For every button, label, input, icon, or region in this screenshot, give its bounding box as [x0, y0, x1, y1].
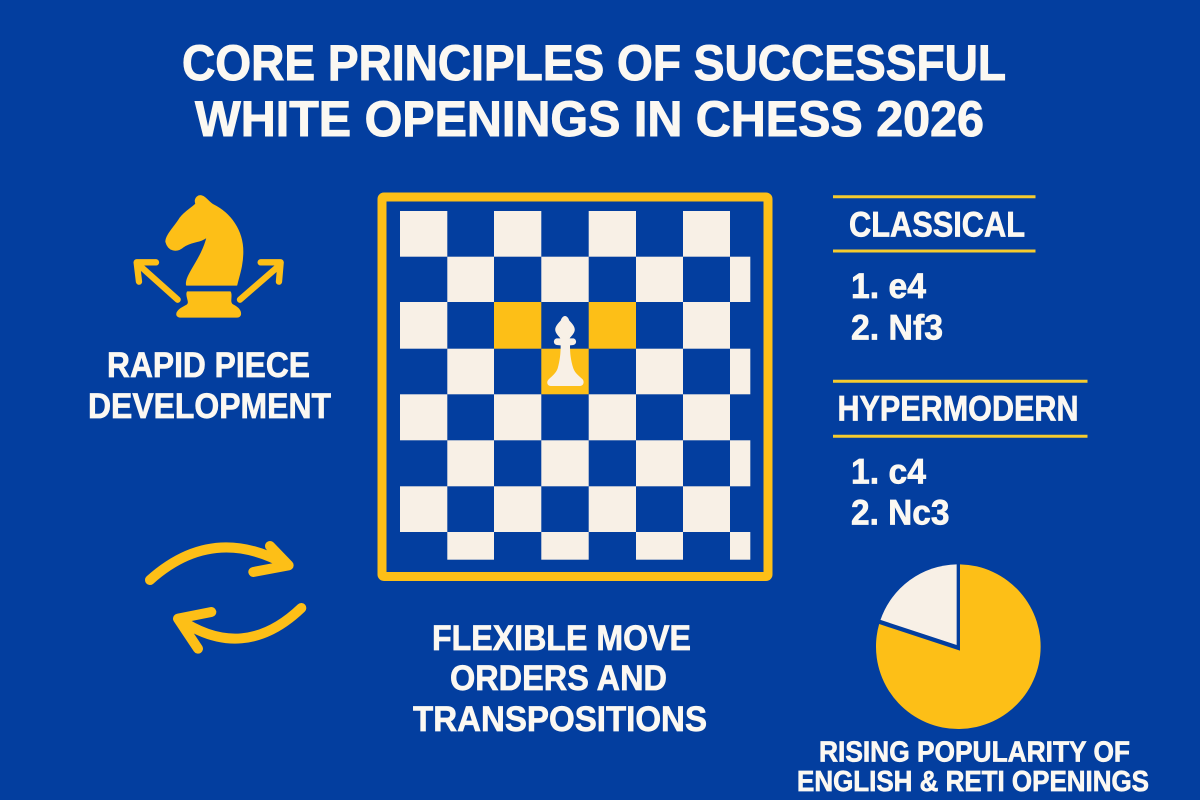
board frame: [382, 197, 768, 576]
highlighted squares: [494, 302, 636, 394]
label: rising popularity of English and Reti openings: ENGLISH & RETI OPENINGS: [797, 766, 1149, 798]
label: rapid piece development: RAPID PIECE: [107, 346, 310, 385]
title: WHITE OPENINGS IN CHESS 2026: [195, 91, 984, 147]
pie chart: [876, 564, 1041, 729]
classical rule lines: [833, 197, 1036, 251]
hypermodern moves: [851, 452, 950, 532]
label: flexible move orders and transpositions: [413, 619, 707, 739]
label: rapid piece development: [88, 346, 331, 426]
bottom arrow: [178, 608, 301, 649]
label: flexible move orders and transpositions: TRANSPOSITIONS: [413, 700, 707, 739]
icon: knight with development arrows: [137, 196, 281, 317]
hypermodern moves: 1. c4: [851, 452, 927, 491]
hypermodern heading: HYPERMODERN: [838, 390, 1078, 429]
label: rising popularity of English and Reti openings: RISING POPULARITY OF: [819, 737, 1130, 769]
icon: white bishop: [547, 316, 584, 386]
top arrow: [150, 546, 289, 580]
title: CORE PRINCIPLES OF SUCCESSFUL: [182, 35, 1006, 91]
panel: classical opening: [833, 197, 1036, 347]
hypermodern rule lines: [833, 381, 1088, 436]
yellow slice: [876, 564, 1041, 729]
label: rapid piece development: DEVELOPMENT: [88, 387, 331, 426]
icon: transposition arrows: [150, 546, 301, 649]
knight base: [177, 292, 240, 317]
label: rising popularity of English and Reti openings: [797, 737, 1149, 798]
classical moves: 2. Nf3: [851, 308, 943, 347]
cream slice: [880, 564, 957, 645]
classical moves: [851, 267, 943, 347]
panel: hypermodern opening: [833, 381, 1088, 532]
title: [182, 35, 1006, 147]
hypermodern moves: 2. Nc3: [851, 493, 950, 532]
classical moves: 1. e4: [851, 267, 927, 306]
knight head: [166, 196, 243, 285]
arrow: up-left: [137, 262, 178, 300]
light squares: [400, 211, 750, 560]
classical heading: CLASSICAL: [849, 206, 1025, 245]
label: flexible move orders and transpositions: FLEXIBLE MOVE: [432, 619, 691, 658]
label: flexible move orders and transpositions: ORDERS AND: [450, 659, 667, 698]
chess board: [382, 197, 768, 576]
arrow: up-right: [240, 262, 281, 300]
